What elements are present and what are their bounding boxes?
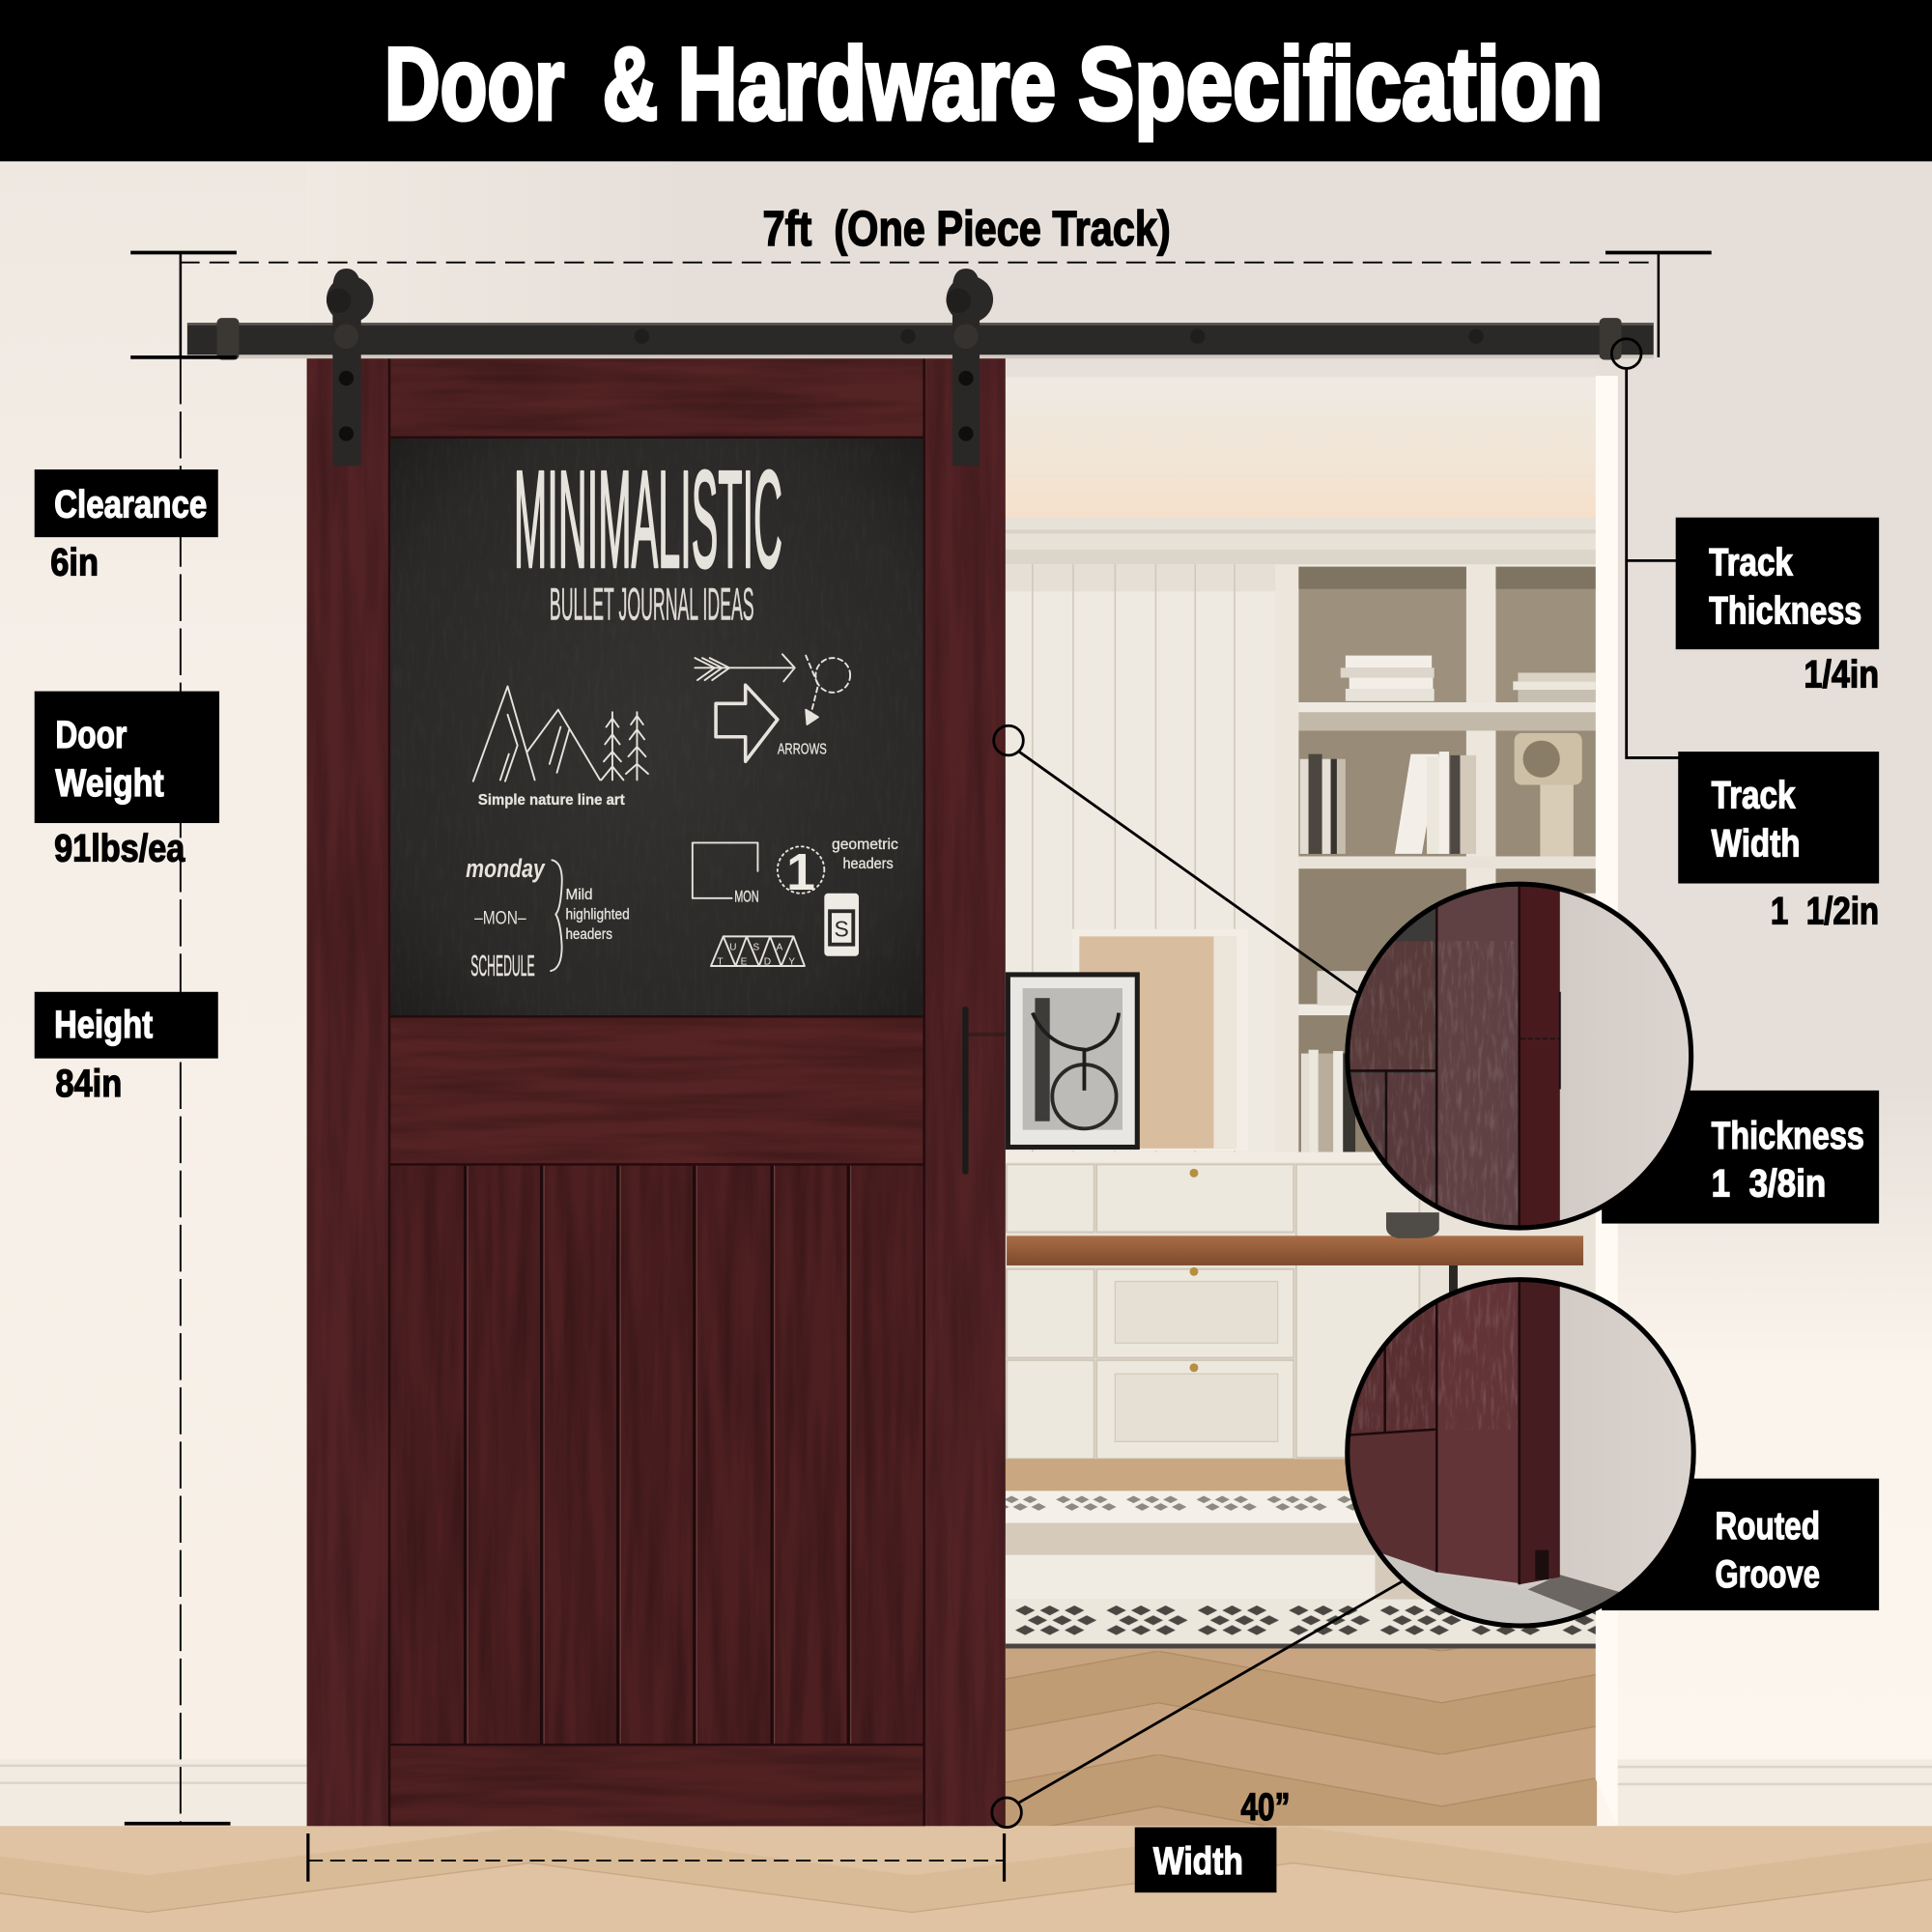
chalk headers examples: –MON– [474,909,526,929]
books [1300,656,1596,1152]
label: door thickness [1602,1091,1879,1224]
label: door weight: Door [55,714,127,756]
title: & [603,26,658,142]
left baseboard [0,1759,308,1828]
bottom rail [389,1745,924,1826]
chalk caption nature: Simple nature line art [478,792,625,809]
label: height [35,992,218,1105]
label: door thickness: 1 3/8in [1712,1163,1826,1206]
chalk geometric headers: S [753,942,759,952]
label: track width: Width [1712,822,1801,865]
barn door [307,356,1006,1826]
top rail [389,357,924,438]
chalk geometric headers: MON [734,888,759,906]
chalk geometric headers: A [777,942,783,952]
label: width [1135,1786,1290,1892]
cabinets [1006,1152,1419,1470]
doorway interior room: MINIMALISTIC [514,443,782,597]
lock rail [389,1016,924,1164]
framed bicycle photo [1006,972,1140,1150]
label: track thickness: Track [1709,542,1794,584]
left hanger strap [327,269,373,466]
door pull handle [962,1007,1006,1175]
chalk headers examples: Mild [565,887,593,903]
label: routed groove [1602,1479,1879,1610]
label: width: 40” [1240,1786,1290,1829]
leaning art print [1072,929,1248,1151]
chalk headers examples: highlighted [565,907,630,923]
label: track thickness [1676,518,1879,696]
chalk geometric headers: geometric [832,837,898,853]
label: track width: 1 1/2in [1771,891,1879,933]
chalk geometric headers: S [835,916,849,941]
label: door weight: 91lbs/ea [54,828,185,870]
sculpture [1515,733,1582,856]
bookcase [1275,564,1597,1155]
label: clearance: Clearance [54,484,207,526]
label: clearance [35,469,218,584]
label: door weight: Weight [55,762,164,805]
label: clearance: 6in [50,542,99,584]
label: track thickness: Thickness [1709,589,1861,632]
dimension: door height [125,357,231,1824]
chalkboard panel: BULLET JOURNAL IDEAS [550,580,754,631]
label: height: 84in [55,1063,122,1105]
right hanger strap [947,269,993,466]
chalk geometric headers: 1 [786,844,815,901]
title: Door [384,26,564,142]
magnifier: door thickness detail [1343,881,1694,1234]
label: track width [1678,752,1879,933]
chalk geometric headers [693,837,898,968]
chalk headers examples [466,854,630,982]
label: width: Width [1153,1840,1243,1883]
right baseboard [1618,1759,1932,1828]
rug and floor [1006,1459,1597,1826]
label: routed groove: Groove [1716,1553,1820,1596]
chalk arrows [695,654,850,761]
chalk geometric headers: U [729,942,736,952]
title: Specification [1078,26,1603,142]
dimension: track length [130,201,1712,357]
chalk mountains and trees [473,686,648,781]
chalk headers examples: headers [565,926,612,943]
chalk headers examples: SCHEDULE [470,950,535,982]
wood floor [0,1826,1932,1932]
label: track width: Track [1712,775,1796,817]
chalk headers examples: monday [466,854,546,883]
label: routed groove: Routed [1716,1505,1820,1548]
chalk caption arrows: ARROWS [778,742,827,758]
table with mug [1007,1212,1583,1302]
label: track thickness: 1/4in [1804,654,1879,696]
label: door thickness: Thickness [1712,1115,1864,1157]
dimension: door width [308,1833,1005,1882]
chalkboard panel [390,439,923,1015]
callout lines [992,339,1681,1828]
label: height: Height [54,1004,153,1046]
chalk geometric headers: E [741,957,748,968]
chalk geometric headers: T [717,957,724,968]
title: Hardware [678,26,1056,142]
title bar [0,0,1932,161]
right doorway jamb [1596,376,1618,1826]
label: door weight [35,692,219,870]
chalk geometric headers: headers [842,856,894,872]
title [384,26,1603,142]
beadboard wall [1006,564,1276,1155]
track stoppers [216,318,1622,359]
dimension: track length: 7ft (One Piece Track) [763,201,1171,256]
plank panel [389,1166,924,1745]
chalk geometric headers: Y [788,957,795,968]
chalk geometric headers: D [764,957,771,968]
magnifier: routed groove detail [1343,1275,1700,1633]
sliding track [187,318,1654,359]
